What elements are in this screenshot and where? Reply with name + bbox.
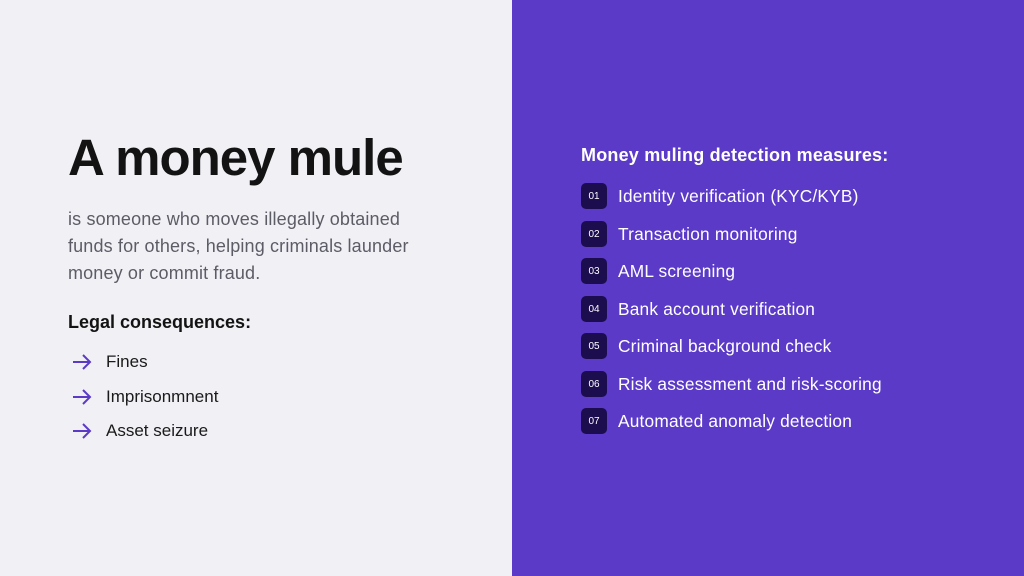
item 04: Bank account verification <box>618 298 815 318</box>
list: consequences <box>73 352 218 440</box>
item 07 <box>581 408 852 434</box>
heading: detection measures: Money muling detection measures: <box>581 145 888 165</box>
item 01: Identity verification (KYC/KYB) <box>618 186 859 206</box>
list: consequences: Imprisonmnent <box>106 387 218 406</box>
description text: is someone who moves illegally obtained funds for others, helping criminals launder money or commit fraud. <box>68 209 409 283</box>
title: A money mule <box>68 129 403 186</box>
item 02: Transaction monitoring <box>618 224 798 244</box>
item: fines <box>73 352 148 371</box>
item 05: 05 <box>588 341 600 352</box>
list: consequences: Fines <box>106 352 148 371</box>
item 02 <box>581 221 798 247</box>
item 07: Automated anomaly detection <box>618 411 852 431</box>
item 06: Risk assessment and risk-scoring <box>618 374 882 394</box>
item: imprisonment <box>73 387 218 406</box>
item 04: 04 <box>588 304 600 314</box>
item 01: 01 <box>588 191 600 202</box>
item 01 <box>581 183 859 209</box>
list: consequences: Asset seizure <box>106 421 208 440</box>
item 02: 02 <box>588 228 600 240</box>
item 05 <box>581 333 832 359</box>
item 03: AML screening <box>618 261 735 281</box>
item 06: 06 <box>588 378 600 390</box>
list: measures <box>581 183 882 434</box>
heading: legal consequences: Legal consequences: <box>68 312 251 332</box>
item 06 <box>581 371 882 397</box>
item 04 <box>581 296 815 322</box>
item 05: Criminal background check <box>618 336 831 356</box>
item 07: 07 <box>588 416 600 427</box>
item: asset seizure <box>73 421 208 440</box>
item 03: 03 <box>588 266 600 277</box>
item 03 <box>581 258 735 284</box>
panel: right background <box>512 0 1024 576</box>
